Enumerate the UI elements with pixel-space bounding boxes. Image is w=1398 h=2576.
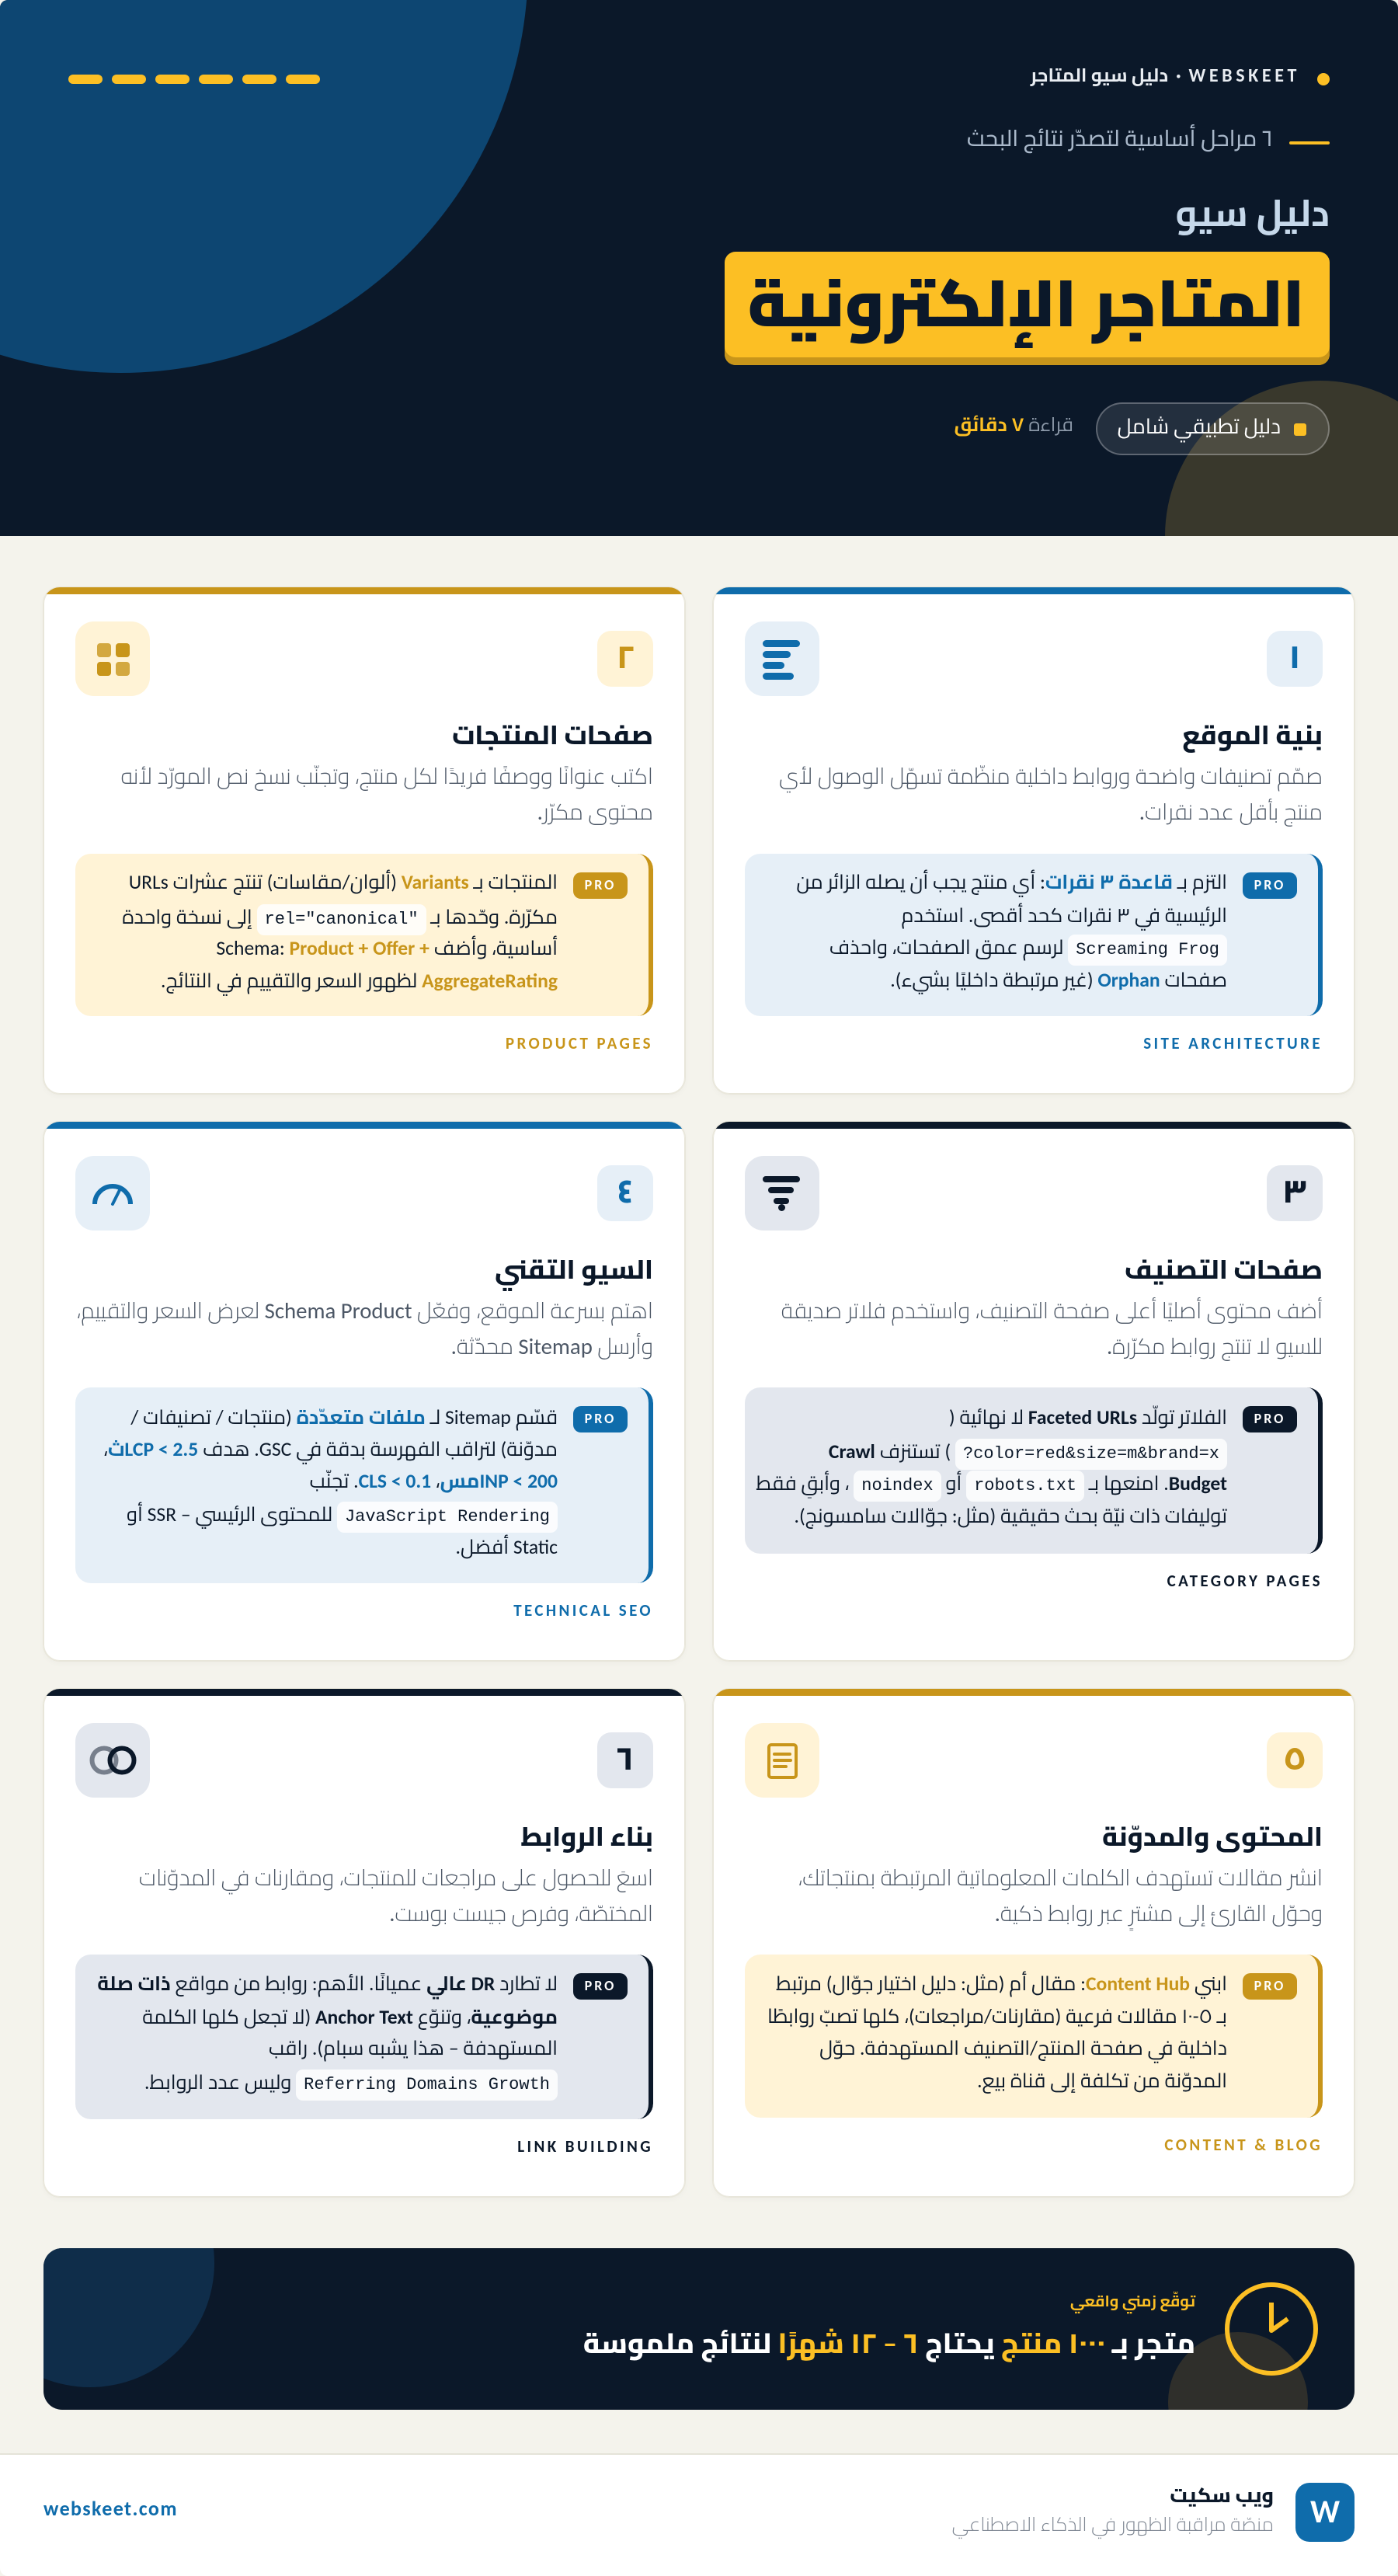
pro tip <box>745 1955 1323 2118</box>
pro tip: لرسم عمق الصفحات، واحذف <box>829 935 1063 959</box>
step number: ١ <box>1288 638 1301 677</box>
footer <box>0 2453 1398 2576</box>
pro tip <box>745 854 1323 1016</box>
pro badge: PRO <box>1254 1977 1285 1994</box>
pro tip: المنتجات بـ Variants (ألوان/مقاسات) تنتج عشرات URLs <box>129 870 558 894</box>
brand name: ويب سكيت <box>1170 2483 1274 2508</box>
pro badge: PRO <box>1254 1410 1285 1427</box>
decorative yellow circle <box>1165 381 1398 691</box>
step number <box>597 631 653 687</box>
panel: site architecture <box>713 587 1355 1094</box>
progress dashes <box>68 75 320 84</box>
pro tip: لا تطارد DR عالي عميانًا. الأهم: روابط من مواقع ذات صلة <box>97 1972 558 1996</box>
logo <box>1295 2483 1355 2542</box>
pro badge: PRO <box>585 1410 616 1427</box>
step number <box>1267 631 1323 687</box>
pro badge <box>1243 1973 1297 2000</box>
heading: بنية الموقع <box>1182 720 1323 752</box>
heading: صفحات المنتجات <box>452 720 653 752</box>
pro tip <box>75 1387 653 1583</box>
pro tip: صفحات Orphan (غير مرتبطة داخليًا بشيء). <box>890 968 1227 992</box>
title highlight box <box>725 252 1330 365</box>
pro tip <box>745 1387 1323 1554</box>
pill text: دليل تطبيقي شامل <box>1118 414 1281 440</box>
description <box>779 763 1323 827</box>
subtitle: ٦ مراحل أساسية لتصدّر نتائج البحث <box>967 124 1273 152</box>
pro tip: للمحتوى الرئيسي – SSR أو <box>127 1502 332 1526</box>
description: وحوّل القارئ إلى مشترٍ عبر روابط ذكية. <box>995 1900 1323 1927</box>
panel: link building <box>43 1689 685 2197</box>
description: محتوى مكرّر. <box>537 799 653 826</box>
pro tip: Budget. امنعها بـ أو ، وأبقِ فقط <box>756 1471 1227 1495</box>
title line two: المتاجر الإلكترونية <box>747 264 1305 344</box>
description <box>798 1864 1323 1931</box>
brand dot <box>1317 73 1330 85</box>
icon: chain rings <box>75 1723 150 1798</box>
pro badge <box>1243 872 1297 899</box>
english label: TECHNICAL SEO <box>513 1600 653 1620</box>
description: منتج بأقل عدد نقرات. <box>1139 799 1323 826</box>
brand tagline: منصّة مراقبة الظهور في الذكاء الاصطناعي <box>952 2512 1274 2536</box>
guide pill <box>1096 402 1330 455</box>
panel: category pages <box>713 1122 1355 1661</box>
website link: webskeet.com <box>43 2496 178 2521</box>
pro tip: قسّم Sitemap لـ ملفات متعدّدة (منتجات / تصنيفات / <box>130 1405 558 1429</box>
pro tip: noindex <box>861 1476 934 1495</box>
description <box>139 1864 653 1927</box>
pro tip: الفلاتر تولّد Faceted URLs لا نهائية ( <box>949 1405 1227 1429</box>
heading: صفحات التصنيف <box>1125 1255 1323 1286</box>
pro badge <box>573 872 628 899</box>
icon: clock <box>1225 2282 1318 2376</box>
english label: CATEGORY PAGES <box>1167 1571 1323 1591</box>
logo: W <box>1310 2492 1340 2532</box>
description: وأرسل Sitemap محدّثة. <box>451 1333 653 1360</box>
icon: site structure bars <box>745 621 819 696</box>
description: اسعَ للحصول على مراجعات للمنتجات، ومقارنات في المدوّنات <box>139 1864 653 1892</box>
panel: technical seo <box>43 1122 685 1661</box>
pro badge: PRO <box>585 876 616 893</box>
step number: ٦ <box>617 1739 634 1779</box>
title line one: دليل سيو <box>1175 190 1330 236</box>
description: اكتب عنوانًا ووصفًا فريدًا لكل منتج، وتجنّب نسخ نص المورّد لأنه <box>121 763 653 790</box>
icon: filter funnel <box>745 1156 819 1231</box>
step number <box>1267 1165 1323 1221</box>
pro tip: المدوّنة من تكلفة إلى قناة بيع. <box>977 2069 1227 2093</box>
step number: ٢ <box>616 638 635 677</box>
pro tip: التزم بـ قاعدة ٣ نقرات: أي منتج يجب أن يصله الزائر من <box>796 870 1227 894</box>
pro tip: ابني Content Hub: مقال أم (مثل: دليل اختيار جوّال) مرتبط <box>776 1972 1227 1996</box>
pro badge <box>573 1406 628 1432</box>
pro tip: مكرّرة. وحّدها بـ إلى نسخة واحدة <box>122 905 558 929</box>
description: أضف محتوى أصليًا أعلى صفحة التصنيف، واستخدم فلاتر صديقة <box>781 1297 1323 1325</box>
banner blue circle <box>0 2139 214 2387</box>
english label: SITE ARCHITECTURE <box>1143 1033 1323 1053</box>
description: المختصّة، وفرص جيست بوست. <box>389 1900 653 1927</box>
pro badge <box>1243 1406 1297 1432</box>
pro tip: مدوّنة) لتراقب الفهرسة بدقة في GSC. هدف LCP < 2.5ث، <box>103 1437 558 1461</box>
panel: product pages <box>43 587 685 1094</box>
pro tip: AggregateRating لظهور السعر والتقييم في النتائج. <box>161 969 558 993</box>
english label: PRODUCT PAGES <box>506 1033 653 1053</box>
pro tip: Static أفضل. <box>455 1535 558 1559</box>
subtitle rule <box>1289 141 1330 144</box>
pro badge: PRO <box>585 1977 616 1994</box>
pro tip: INP < 200مس، CLS < 0.1. تجنّب <box>310 1469 558 1493</box>
heading: السيو التقني <box>495 1255 653 1286</box>
description: صمّم تصنيفات واضحة وروابط داخلية منظّمة تسهّل الوصول لأي <box>779 763 1323 790</box>
pro tip <box>75 1955 653 2119</box>
banner statement: متجر بـ ١٠٠٠ منتج يحتاج ٦ – ١٢ شهرًا لنتائج ملموسة <box>583 2326 1195 2361</box>
pro tip: robots.txt <box>974 1476 1076 1495</box>
pro tip: ) تستنزف Crawl <box>829 1439 951 1464</box>
step number: ٣ <box>1282 1172 1307 1212</box>
pro tip: JavaScript Rendering <box>345 1507 550 1526</box>
icon: speed gauge <box>75 1156 150 1231</box>
pro tip: وليس عدد الروابط. <box>144 2070 291 2094</box>
pill square <box>1294 423 1306 436</box>
pro tip: المستهدفة – هذا يشبه سبام). راقب <box>269 2036 558 2060</box>
heading: بناء الروابط <box>521 1822 653 1854</box>
pro tip: rel="canonical" <box>264 910 419 929</box>
pro tip: بـ ٥-١٠ مقالات فرعية (مقارنات/مراجعات)، كلها تصبّ روابطًا <box>767 2004 1227 2028</box>
pro tip: ?color=red&size=m&brand=x <box>963 1444 1219 1464</box>
banner yellow circle <box>1168 2332 1308 2472</box>
pro badge <box>573 1973 628 2000</box>
step number <box>1267 1732 1323 1788</box>
reading time: قراءة ٧ دقائق <box>955 413 1073 437</box>
pro tip: أساسية، وأضف Schema: Product + Offer + <box>216 936 558 960</box>
step number: ٤ <box>617 1172 633 1212</box>
panel: content and blog <box>713 1689 1355 2197</box>
pro tip: Referring Domains Growth <box>304 2075 550 2094</box>
step number <box>597 1165 653 1221</box>
banner eyebrow: توقّع زمني واقعي <box>1070 2292 1195 2311</box>
pro badge: PRO <box>1254 876 1285 893</box>
heading: المحتوى والمدوّنة <box>1102 1822 1323 1854</box>
pro tip: Screaming Frog <box>1076 940 1219 959</box>
pro tip: داخلية في صفحة المنتج/التصنيف المستهدفة. حوّل <box>819 2036 1227 2060</box>
pro tip: الرئيسية في ٣ نقرات كحد أقصى. استخدم <box>901 903 1227 928</box>
description <box>121 763 653 826</box>
step number <box>597 1732 653 1788</box>
brand line: WEBSKEET·دليل سيو المتاجر <box>1031 64 1300 87</box>
description: للسيو لا تنتج روابط مكرّرة. <box>1107 1333 1323 1360</box>
description <box>781 1297 1323 1361</box>
pro tip <box>75 854 653 1016</box>
step number: ٥ <box>1283 1739 1306 1779</box>
description: اهتم بسرعة الموقع، وفعّل Schema Product لعرض السعر والتقييم، <box>77 1297 653 1325</box>
icon: document <box>745 1723 819 1798</box>
header panel <box>0 0 1398 536</box>
description: انشر مقالات تستهدف الكلمات المعلوماتية المرتبطة بمنتجاتك، <box>798 1864 1323 1892</box>
description <box>77 1297 653 1360</box>
icon: product grid <box>75 621 150 696</box>
decorative blue circle <box>0 0 528 373</box>
pro tip: موضوعية، وتنوّع Anchor Text (لا تجعل كلها الكلمة <box>142 2005 558 2029</box>
timeline banner <box>43 2248 1355 2410</box>
pro tip: توليفات ذات نيّة بحث حقيقية (مثل: جوّالات سامسونج). <box>795 1504 1227 1528</box>
english label: CONTENT & BLOG <box>1164 2135 1323 2155</box>
english label: LINK BUILDING <box>517 2136 653 2157</box>
